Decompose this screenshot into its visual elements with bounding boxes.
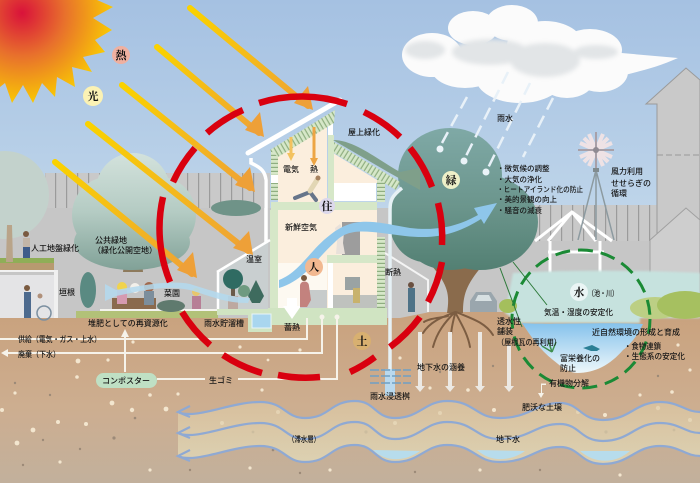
badge: light [83, 86, 103, 106]
badge: light: 光 [88, 89, 98, 103]
labels: 蓄熱 [284, 322, 300, 332]
garden breeze arrow [105, 283, 250, 303]
labels: 風力利用 [611, 166, 643, 176]
labels: 温室 [246, 254, 262, 264]
badge: soil [353, 332, 371, 350]
labels: 供給（電気・ガス・上水） [18, 334, 101, 344]
roof solar panel [248, 100, 340, 153]
fresh air arrow [279, 203, 497, 288]
heat storage arrow [283, 298, 301, 319]
labels: ・ヒートアイランド化の防止 [497, 184, 583, 194]
house walls [278, 120, 327, 309]
labels: 熱 [310, 164, 318, 174]
labels: 断熱 [385, 267, 401, 277]
ground [0, 309, 700, 483]
rain [436, 72, 553, 176]
labels: ・生態系の安定化 [624, 351, 685, 361]
groundwater recharge arrows [415, 332, 546, 398]
labels: ・美的景観の向上 [497, 194, 557, 204]
labels: 循環 [611, 188, 627, 198]
labels: 生ゴミ [209, 375, 233, 385]
rain gutter right [390, 188, 402, 375]
small tree behind house [211, 200, 261, 216]
labels: （滞水層） [288, 434, 320, 444]
labels: 地下水の涵養 [417, 362, 465, 372]
badge: dwelling [319, 198, 335, 214]
right bushes [499, 291, 700, 319]
red dashed circle [159, 97, 442, 378]
windmill [578, 132, 614, 240]
base slab [217, 308, 387, 332]
labels: 菜園 [164, 288, 180, 298]
sun [0, 0, 113, 103]
car [470, 292, 497, 312]
labels: 気温・湿度の安定化 [544, 307, 613, 317]
composter pill [96, 373, 157, 388]
labels: 雨水 [497, 113, 513, 123]
badge: water [570, 283, 588, 301]
cloud [402, 5, 678, 103]
labels: 有機物分解 [549, 378, 589, 388]
solar rays [55, 8, 313, 278]
labels: 廃棄（下水） [18, 349, 60, 359]
badge: water: 水 [574, 285, 584, 299]
labels: 屋上緑化 [348, 127, 380, 137]
pond [522, 323, 643, 373]
badge: people [305, 258, 323, 276]
badge: dwelling: 住 [322, 199, 332, 213]
large tree [389, 128, 538, 348]
rain infiltration basin [370, 369, 411, 396]
utility lines [0, 316, 338, 379]
labels: 新鮮空気 [285, 222, 317, 232]
labels: 透水性 [497, 316, 521, 326]
labels: 防止 [560, 363, 576, 373]
badge: heat: 熱 [116, 48, 128, 62]
labels: 雨水浸透桝 [370, 391, 410, 401]
labels: 近自然環境の形成と育成 [592, 327, 680, 337]
badge: green [442, 171, 460, 189]
leader lines [500, 262, 547, 327]
ground speckles [0, 340, 692, 477]
badge: people: 人 [308, 261, 320, 274]
water tank [252, 314, 271, 328]
lower roof green [333, 140, 420, 190]
sky background [0, 0, 700, 320]
labels: （緑化公開空地） [93, 245, 157, 255]
labels: 人工地盤緑化 [31, 243, 79, 253]
labels: 堆肥としての再資源化 [88, 318, 168, 328]
labels: 地下水 [496, 434, 520, 444]
house [217, 100, 420, 375]
labels [18, 113, 685, 444]
labels: ・微気候の調整 [497, 163, 550, 173]
people [300, 282, 311, 307]
labels: 舗装 [497, 327, 513, 336]
labels: 垣根 [59, 287, 75, 297]
labels: 肥沃な土壌 [522, 402, 562, 412]
badge: heat [112, 46, 130, 64]
labels: ・大気の浄化 [497, 174, 542, 184]
people in garden [23, 231, 415, 320]
composter pill: コンポスター [102, 376, 150, 386]
green dashed circle [512, 250, 650, 388]
pond mist [505, 271, 700, 323]
labels: 電気 [283, 164, 299, 174]
rain gutter left [251, 158, 266, 310]
background buildings and fences [0, 68, 700, 320]
aquifer waves [178, 401, 700, 464]
labels: せせらぎの [611, 178, 651, 188]
labels: ・食物連鎖 [624, 341, 661, 351]
greenhouse [217, 240, 270, 309]
labels: ・騒音の減衰 [497, 205, 542, 215]
badge: green: 緑 [446, 173, 456, 187]
labels: 雨水貯溜槽 [204, 318, 244, 328]
energy arrows inside roof [287, 127, 318, 166]
labels: 富栄養化の [560, 353, 600, 363]
labels: （屋根瓦の再利用） [497, 337, 561, 347]
left tree [72, 153, 196, 272]
badge: soil: 土 [356, 334, 368, 348]
labels: 公共緑地 [95, 235, 127, 245]
labels: （池・川） [588, 288, 618, 298]
far left tree [0, 151, 49, 262]
